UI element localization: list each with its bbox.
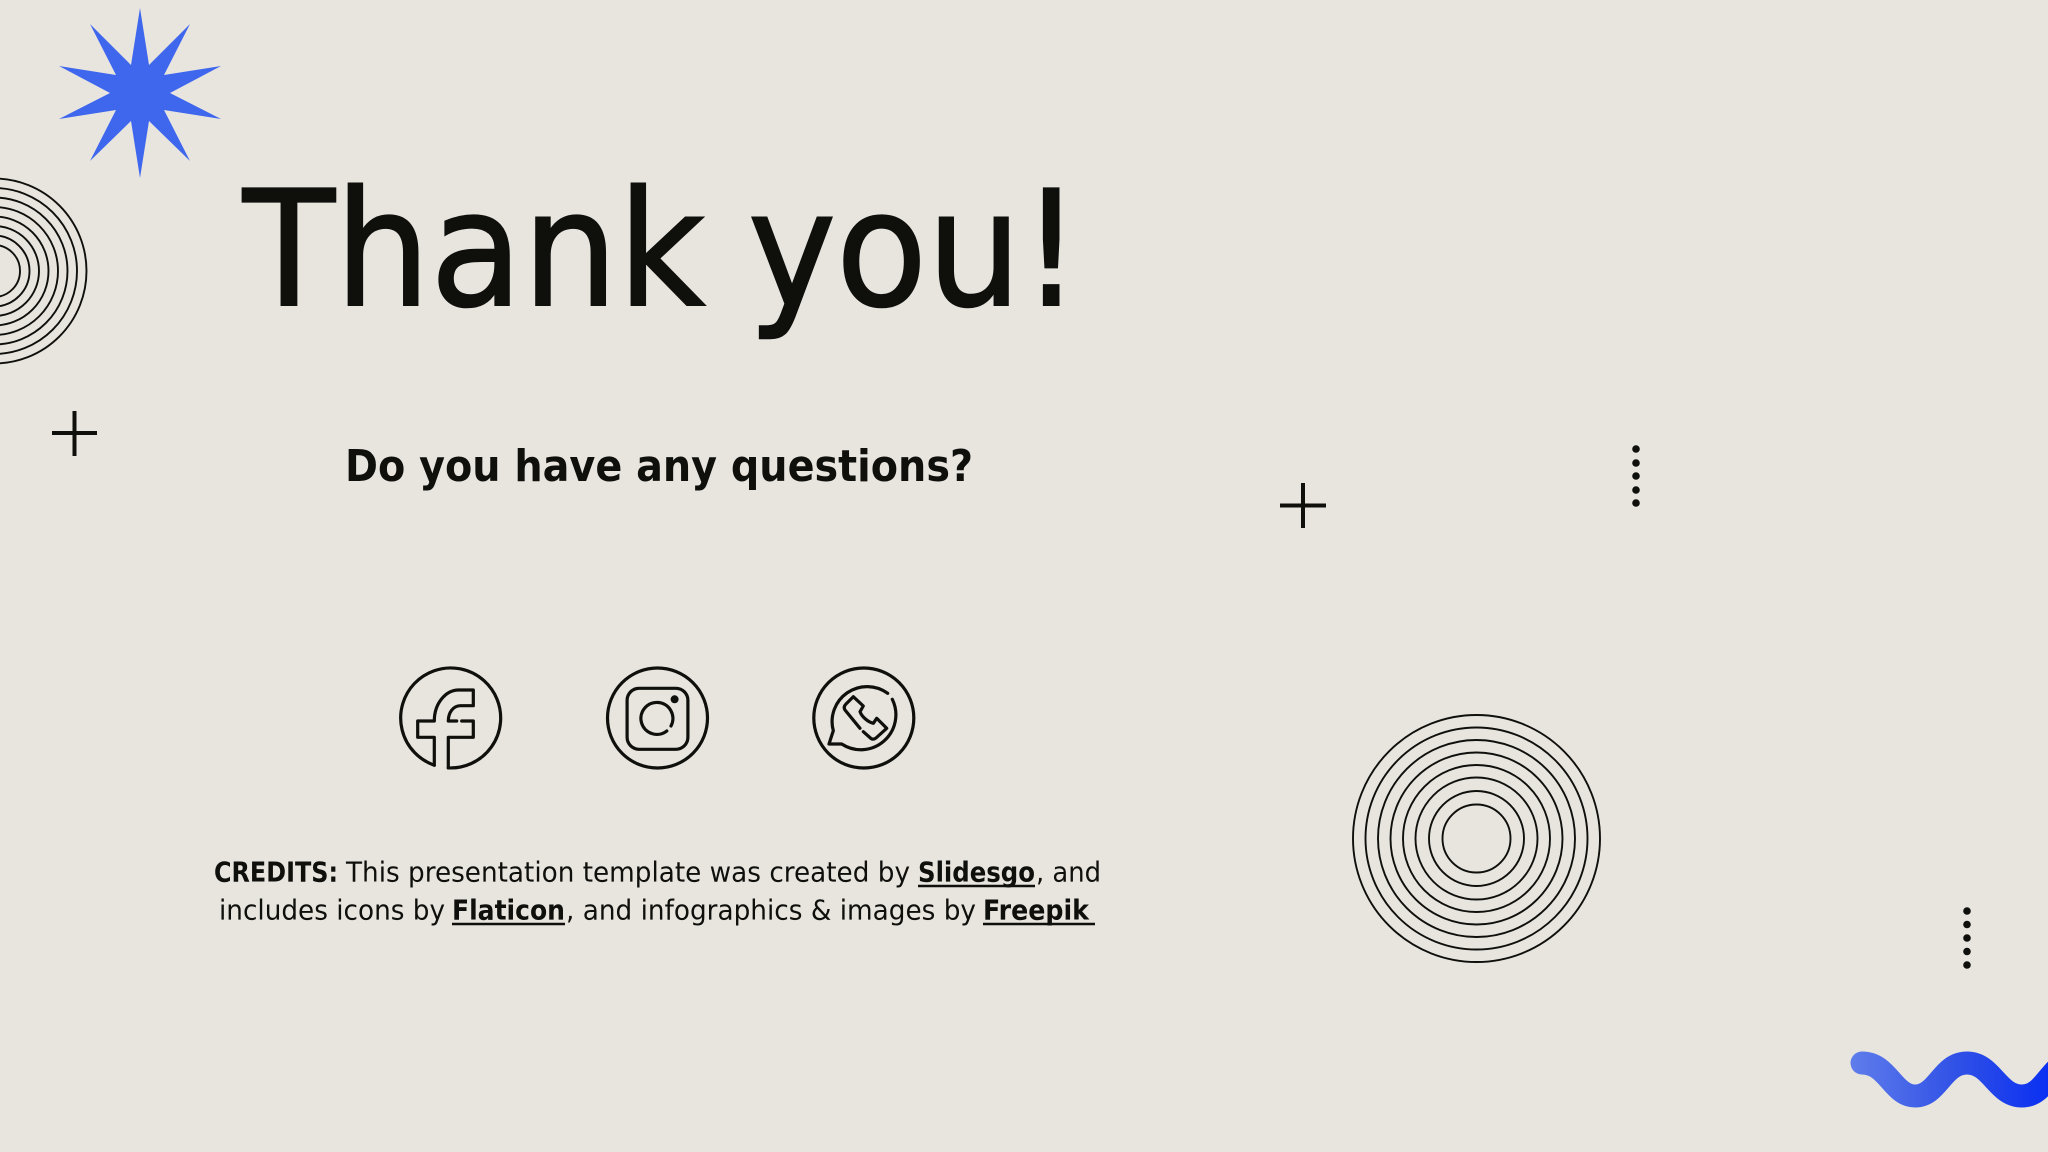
credits text bbox=[214, 856, 1101, 926]
concentric circles: lower right bbox=[1353, 715, 1600, 962]
credits text: Freepik bbox=[983, 894, 1090, 926]
icon: facebook bbox=[401, 668, 501, 768]
title: Thank bbox=[242, 156, 705, 343]
concentric circles: left edge bbox=[0, 178, 86, 364]
credits text: This presentation template was created by bbox=[345, 856, 910, 888]
dots: lower right bbox=[1963, 907, 1971, 969]
title bbox=[242, 156, 1081, 343]
credits text: , and infographics & images by bbox=[566, 894, 976, 926]
credits text: Flaticon bbox=[452, 894, 565, 926]
icon: plus right bbox=[1280, 483, 1326, 528]
credits text: CREDITS: bbox=[214, 856, 338, 888]
credits text: Slidesgo bbox=[918, 856, 1035, 888]
icon: whatsapp bbox=[814, 668, 914, 768]
credits text: , and bbox=[1036, 856, 1101, 888]
title: you! bbox=[748, 156, 1081, 343]
wave: blue gradient squiggle bbox=[1862, 1063, 2048, 1096]
dots: upper right bbox=[1632, 445, 1640, 507]
subtitle: Do you have any questions? bbox=[345, 441, 973, 492]
icon: instagram bbox=[608, 668, 708, 768]
credits text: includes icons by bbox=[219, 894, 445, 926]
icon: plus left bbox=[52, 411, 97, 456]
icon: blue starburst bbox=[59, 8, 221, 178]
